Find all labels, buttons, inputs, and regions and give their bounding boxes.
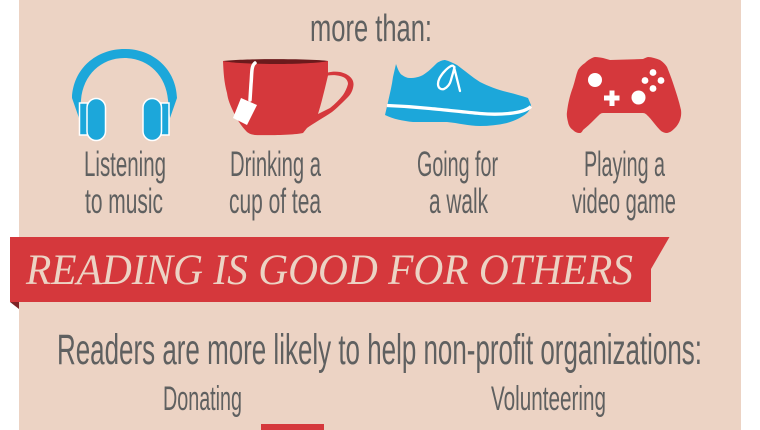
label: going for a walk	[417, 145, 498, 221]
label: donating: Donating	[163, 380, 242, 418]
icon: running shoe	[385, 60, 531, 126]
heading: more than: more than:	[310, 8, 432, 50]
label: drinking a cup of tea: Drinking a	[230, 145, 321, 184]
banner: reading is good for others: READING IS GOOD FOR OTHERS	[25, 247, 633, 294]
label: listening to music	[84, 145, 166, 221]
label: listening to music: Listening	[84, 145, 166, 184]
label: playing a video game: Playing a	[584, 145, 665, 184]
label: drinking a cup of tea	[229, 145, 321, 221]
banner: reading is good for others	[10, 237, 670, 309]
label: volunteering: Volunteering	[491, 380, 606, 418]
icon: headphones	[72, 49, 177, 140]
label: playing a video game	[572, 145, 676, 221]
label: drinking a cup of tea: cup of tea	[229, 182, 321, 221]
bar: donating chart top	[261, 424, 324, 430]
label: going for a walk: a walk	[429, 182, 488, 221]
icon: game controller	[567, 57, 681, 133]
label: going for a walk: Going for	[417, 145, 498, 184]
label: listening to music: to music	[85, 182, 163, 221]
icon: tea cup	[223, 59, 354, 135]
label: playing a video game: video game	[572, 182, 676, 221]
